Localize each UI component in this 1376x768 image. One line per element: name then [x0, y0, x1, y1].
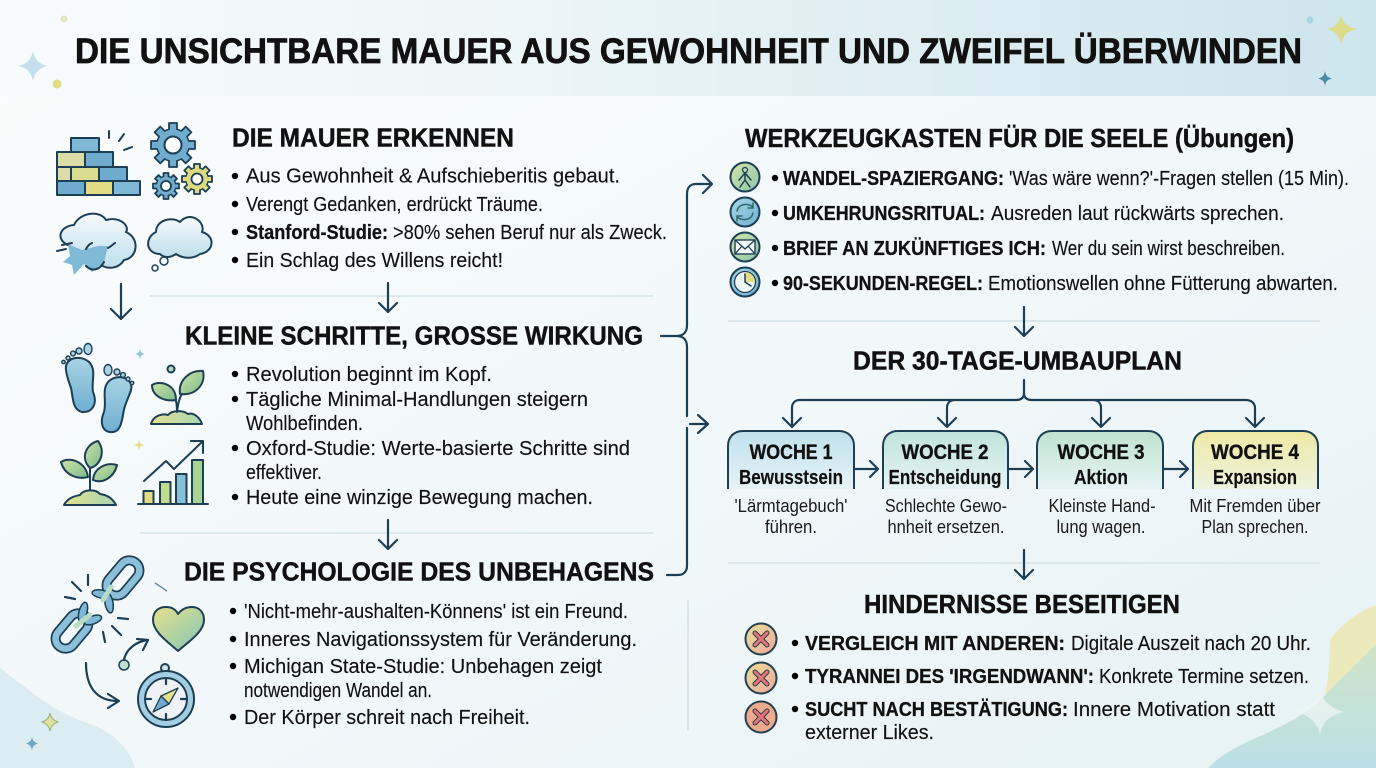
- icon: small sprout: [151, 366, 204, 424]
- heading: KLEINE SCHRITTE, GROSSE WIRKUNG: [185, 320, 643, 350]
- card: Woche 4: WOCHE 4: [1211, 441, 1299, 464]
- text block: exercises: BRIEF AN ZUKÜNFTIGES ICH:: [783, 237, 1046, 260]
- card: Woche 2: hnheit ersetzen.: [888, 516, 1004, 537]
- decorative corner shape: bottom left: [0, 668, 135, 768]
- sparkles: [133, 349, 145, 450]
- icon: cross two: [746, 662, 776, 694]
- text block: discomfort bullets: Der Körper schreit nach Freiheit.: [244, 706, 530, 729]
- arrow: connector to toolbox: [661, 175, 712, 416]
- panel: Die Mauer erkennen: [57, 122, 667, 319]
- icon: clock: [730, 268, 760, 296]
- arrow: section one to two: [379, 283, 397, 312]
- text block: discomfort bullets: Inneres Navigationssystem für Veränderung.: [244, 628, 637, 651]
- text block: obstacles: Digitale Auszeit nach 20 Uhr.: [1071, 632, 1311, 655]
- text block: obstacles: Konkrete Termine setzen.: [1099, 665, 1309, 688]
- text block: exercises: UMKEHRUNGSRITUAL:: [783, 202, 985, 225]
- sparkle: top left: [18, 16, 68, 88]
- decorative corner shape: bottom right: [1208, 605, 1376, 768]
- text block: discomfort bullets: 'Nicht-mehr-aushalten-Könnens' ist ein Freund.: [244, 600, 628, 623]
- text block: wall bullets: >80% sehen Beruf nur als Zweck.: [393, 221, 667, 244]
- arrow: week 2 to 3: [1009, 461, 1033, 477]
- text block: discomfort bullets: notwendigen Wandel an.: [244, 679, 432, 702]
- card: Woche 2: WOCHE 2: [902, 441, 988, 464]
- card: Woche 2: [883, 431, 1008, 537]
- text block: small steps bullets: effektiver.: [246, 461, 322, 484]
- heading: DIE PSYCHOLOGIE DES UNBEHAGENS: [184, 556, 654, 586]
- card: Woche 3: Aktion: [1074, 467, 1128, 489]
- text block: discomfort bullets: [230, 600, 637, 729]
- text block: obstacles: SUCHT NACH BESTÄTIGUNG:: [805, 698, 1068, 721]
- icon: broken chain: [51, 556, 167, 653]
- text block: exercises: WANDEL-SPAZIERGANG:: [783, 167, 1004, 190]
- card: Woche 4: [1190, 431, 1320, 537]
- text block: small steps bullets: [232, 363, 630, 509]
- title band: [0, 0, 1376, 96]
- icon: brick wall: [57, 131, 140, 195]
- heading: DIE MAUER ERKENNEN: [232, 122, 514, 152]
- text block: wall bullets: Verengt Gedanken, erdrückt Träume.: [246, 193, 543, 216]
- panel: 30-Tage-Umbauplan: [728, 346, 1320, 579]
- panel: Die Psychologie des Unbehagens: [26, 556, 654, 750]
- text block: small steps bullets: Oxford-Studie: Werte-basierte Schritte sind: [246, 437, 630, 460]
- icon: thought cloud: [148, 217, 212, 271]
- card: Woche 1: WOCHE 1: [750, 441, 833, 464]
- arrow: left column down: [111, 284, 131, 319]
- text block: wall bullets: Stanford-Studie:: [246, 221, 388, 244]
- sparkle: top right: [1306, 14, 1358, 86]
- card: Woche 2: Entscheidung: [888, 467, 1002, 489]
- heading: DER 30-TAGE-UMBAUPLAN: [853, 346, 1182, 376]
- panel: Hindernisse beseitigen: [746, 589, 1311, 744]
- icon: gears: [151, 123, 212, 199]
- text block: discomfort bullets: Michigan State-Studie: Unbehagen zeigt: [244, 655, 602, 678]
- text block: exercises: Wer du sein wirst beschreiben.: [1052, 237, 1285, 260]
- heading: HINDERNISSE BESEITIGEN: [864, 589, 1180, 619]
- text block: wall bullets: Aus Gewohnheit & Aufschieberitis gebaut.: [246, 164, 620, 188]
- text block: small steps bullets: Wohlbefinden.: [246, 412, 363, 435]
- icon: bursting cloud: [57, 214, 136, 275]
- panel: Werkzeugkasten: [728, 123, 1349, 336]
- card: Woche 1: Bewusstsein: [739, 467, 843, 489]
- text block: exercises: Ausreden laut rückwärts sprechen.: [991, 202, 1284, 225]
- text block: obstacles: VERGLEICH MIT ANDEREN:: [805, 632, 1065, 655]
- text block: wall bullets: [232, 164, 667, 272]
- icon: compass: [138, 664, 194, 727]
- arrow: to compass: [86, 663, 119, 708]
- card: Woche 2: Schlechte Gewo-: [885, 495, 1007, 516]
- text block: exercises: Emotionswellen ohne Fütterung abwarten.: [988, 272, 1338, 295]
- title: DIE UNSICHTBARE MAUER AUS GEWOHNHEIT UND ZWEIFEL ÜBERWINDEN: [75, 32, 1302, 71]
- arrow: tree to weeks: [783, 380, 1264, 427]
- icon: growth chart: [138, 441, 208, 504]
- icon: reversal arrows: [730, 198, 760, 226]
- icon: heart: [153, 607, 204, 651]
- card: Woche 4: Plan sprechen.: [1202, 516, 1308, 537]
- sparkles: [26, 713, 58, 750]
- card: Woche 3: WOCHE 3: [1058, 441, 1144, 464]
- card: Woche 1: 'Lärmtagebuch': [734, 495, 848, 516]
- text block: obstacles: [792, 632, 1311, 744]
- text block: small steps bullets: Tägliche Minimal-Handlungen steigern: [246, 388, 588, 411]
- text block: obstacles: Innere Motivation statt: [1073, 698, 1275, 721]
- arrow: connector to plan: [667, 415, 708, 575]
- heading: WERKZEUGKASTEN FÜR DIE SEELE (Übungen): [745, 123, 1294, 153]
- card: Woche 4: Mit Fremden über: [1190, 495, 1320, 516]
- panel: Kleine Schritte, grosse Wirkung: [61, 320, 653, 549]
- icon: letter: [730, 232, 760, 262]
- text block: obstacles: externer Likes.: [805, 721, 934, 744]
- arrow: week 3 to 4: [1164, 461, 1188, 477]
- icon: plant: [61, 441, 117, 505]
- text block: small steps bullets: Heute eine winzige Bewegung machen.: [246, 486, 593, 509]
- card: Woche 1: [728, 431, 854, 537]
- text block: small steps bullets: Revolution beginnt im Kopf.: [246, 363, 492, 386]
- card: Woche 1: führen.: [765, 516, 817, 537]
- card: Woche 3: [1037, 431, 1163, 537]
- card: Woche 3: lung wagen.: [1056, 516, 1146, 537]
- arrow: plan to obstacles: [1015, 550, 1033, 579]
- text block: obstacles: TYRANNEI DES 'IRGENDWANN':: [805, 665, 1094, 688]
- icon: walking person: [730, 162, 760, 192]
- text block: exercises: [772, 167, 1349, 295]
- arrow: to heart: [119, 639, 148, 670]
- arrow: week 1 to 2: [855, 461, 878, 477]
- card: Woche 3: Kleinste Hand-: [1048, 495, 1156, 516]
- icon: cross three: [746, 702, 776, 732]
- text block: wall bullets: Ein Schlag des Willens reicht!: [246, 249, 503, 272]
- text block: exercises: 90-SEKUNDEN-REGEL:: [783, 272, 983, 295]
- arrow: section two to three: [379, 520, 397, 549]
- arrow: toolbox to plan: [1015, 307, 1033, 336]
- card: Woche 4: Expansion: [1213, 467, 1297, 489]
- icon: footprints: [62, 344, 134, 432]
- icon: cross one: [746, 624, 776, 654]
